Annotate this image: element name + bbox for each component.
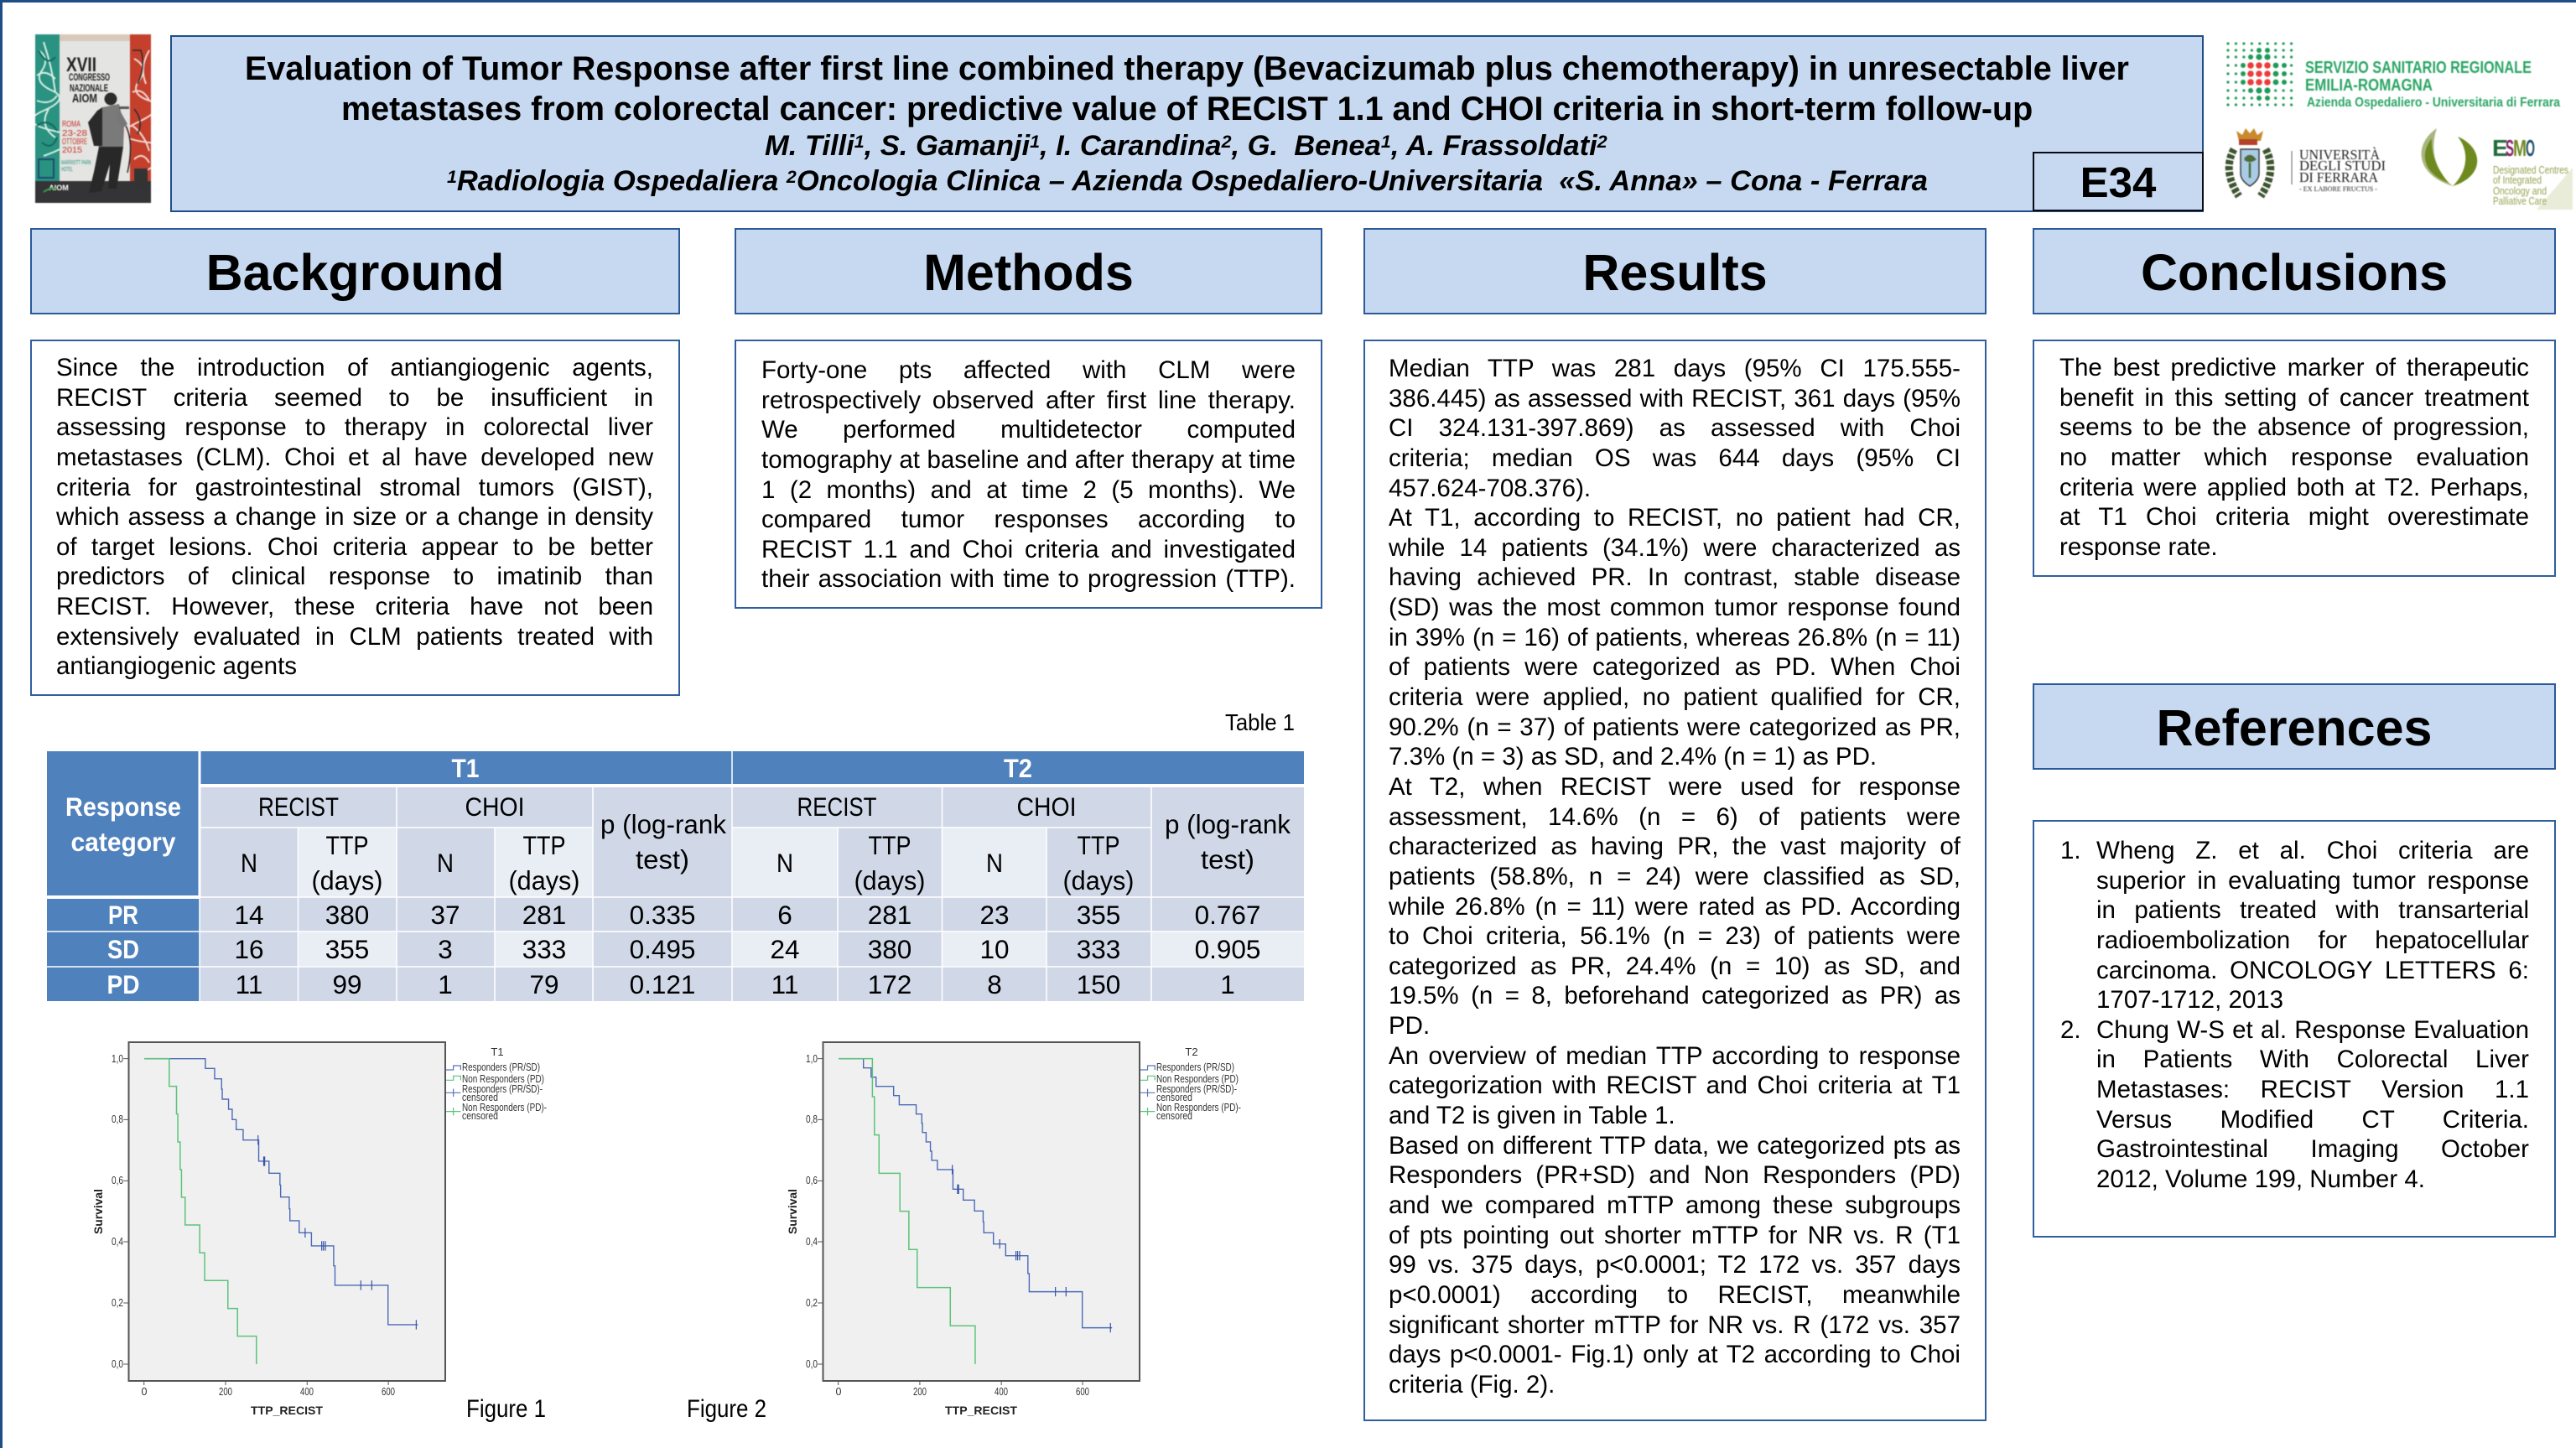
- panel: results text: categorization with RECIST and Choi criteria at T1: [1389, 1072, 1961, 1099]
- table row: PR: 355: [1077, 900, 1120, 930]
- poster image: AIOM congress: ROMA: [62, 120, 80, 129]
- panel: background text: criteria for gastrointestinal stromal tumors (GIST),: [56, 474, 653, 501]
- table column headings: (days): [854, 865, 926, 895]
- reference 2: in Patients With Colorectal Liver: [2096, 1046, 2529, 1073]
- chart: Kaplan-Meier T2: 1,0: [806, 1053, 818, 1065]
- reference 1: radioembolization for hepatocellular: [2096, 926, 2529, 954]
- chart: Kaplan-Meier T2: 0,4: [806, 1236, 818, 1248]
- logo: Universita degli Studi di Ferrara: [2224, 127, 2386, 199]
- panel: methods text: [735, 340, 1322, 609]
- table header: T1 and T2: PD: [107, 969, 139, 999]
- chart: Kaplan-Meier T2: Survival: [786, 1189, 799, 1234]
- table header: T1 and T2: PR: [108, 900, 138, 930]
- chart: Kaplan-Meier T1: 0: [142, 1386, 148, 1398]
- panel: methods text: RECIST 1.1 and Choi criteria and investigated: [761, 536, 1296, 563]
- panel: background text: predictors of clinical response to imatinib than: [56, 563, 653, 590]
- panel: conclusions text: response rate.: [2059, 533, 2218, 561]
- panel: results text: to Choi criteria, 56.1% (n = 23) of patients were: [1389, 922, 1961, 950]
- panel: conclusions text: benefit in this setting of cancer treatment: [2059, 384, 2529, 412]
- panel: conclusions text: [2033, 340, 2556, 577]
- table row: SD: [234, 934, 1260, 964]
- chart: Kaplan-Meier T2: 0: [836, 1386, 842, 1398]
- reference 2: Metastases: RECIST Version 1.1: [2096, 1076, 2529, 1103]
- table column headings: p (log-rank: [1165, 809, 1291, 839]
- table row: SD: 10: [979, 934, 1010, 964]
- reference 2: Chung W-S et al. Response Evaluation: [2096, 1016, 2529, 1044]
- chart: Kaplan-Meier T2: 0,0: [806, 1358, 818, 1370]
- chart: Kaplan-Meier T2: 400: [995, 1386, 1008, 1398]
- table row: SD: 333: [1077, 934, 1120, 964]
- poster image: AIOM congress: 23-28: [62, 129, 88, 138]
- chart: Kaplan-Meier T1: TTP_RECIST: [251, 1404, 323, 1417]
- heading: Background: [30, 228, 680, 314]
- poster code E34: E34: [2080, 158, 2156, 206]
- chart: Kaplan-Meier T1: [91, 1041, 547, 1417]
- logo: ESMO designated centre: O: [2526, 135, 2535, 161]
- logo: Universita degli Studi di Ferrara: UNIVERSITÀ: [2299, 147, 2380, 163]
- chart: Kaplan-Meier T1: T1: [491, 1046, 504, 1058]
- panel: background text: Since the introduction of antiangiogenic agents,: [56, 354, 653, 381]
- logo: Servizio Sanitario Regionale Emilia-Romagna: EMILIA-ROMAGNA: [2305, 76, 2433, 95]
- table column headings: N: [437, 848, 454, 878]
- panel: results text: Responders (PR+SD) and Non Responders (PD): [1389, 1161, 1961, 1189]
- title banner: [170, 35, 2204, 212]
- panel: results text: At T2, when RECIST were used for response: [1389, 773, 1961, 801]
- panel: references list: [2033, 820, 2556, 1238]
- panel: methods text: retrospectively observed after first line therapy.: [761, 387, 1296, 414]
- heading: Conclusions: Conclusions: [2141, 244, 2448, 301]
- chart: Kaplan-Meier T1: 200: [219, 1386, 232, 1398]
- chart: Kaplan-Meier T1: censored: [462, 1092, 498, 1103]
- table row: PR: 281: [522, 900, 566, 930]
- chart: Kaplan-Meier T1: Survival: [91, 1189, 105, 1234]
- table header: T1 and T2: T2: [1004, 753, 1032, 783]
- title line 2: metastases from colorectal cancer: predictive value of RECIST 1.1 and CHOI criteria in short-term follow-up: [341, 91, 2033, 127]
- heading: Conclusions: [2033, 228, 2556, 314]
- chart: Kaplan-Meier T1: 0,6: [112, 1175, 123, 1186]
- table column headings: RECIST: [797, 791, 877, 822]
- table header: T1 and T2: SD: [107, 934, 139, 964]
- panel: results text: [1363, 340, 1987, 1421]
- panel: results text: Median TTP was 281 days (95% CI 175.555-: [1389, 355, 1961, 382]
- reference 1: in patients treated with transarterial: [2096, 896, 2529, 924]
- panel: conclusions text: at T1 Choi criteria might overestimate: [2059, 503, 2529, 531]
- caption: Table 1: Table 1: [1225, 709, 1295, 735]
- panel: conclusions text: The best predictive marker of therapeutic: [2059, 354, 2529, 381]
- table row: PD: 11: [236, 969, 262, 999]
- panel: background text: RECIST criteria seemed to be insufficient in: [56, 384, 653, 412]
- table column headings: (days): [1063, 865, 1134, 895]
- logo: ESMO designated centre: M: [2513, 135, 2527, 161]
- panel: results text: CI 324.131-397.869) as assessed with Choi: [1389, 414, 1961, 442]
- table row: PD: 11: [771, 969, 798, 999]
- poster image: AIOM congress: AIOM: [72, 91, 97, 106]
- panel: results text: having achieved PR. In contrast, stable disease: [1389, 563, 1961, 591]
- chart: Kaplan-Meier T2: TTP_RECIST: [945, 1404, 1017, 1417]
- table column headings: TTP: [523, 830, 565, 860]
- chart: Kaplan-Meier T2: 600: [1076, 1386, 1089, 1398]
- panel: results text: of patients were categorized as PD. When Choi: [1389, 653, 1961, 681]
- logo: ESMO designated centre: S: [2506, 135, 2514, 161]
- table header: T1 and T2: Response: [65, 791, 181, 822]
- heading: References: References: [2157, 699, 2432, 756]
- table row: PR: 6: [777, 900, 792, 930]
- logo: Universita degli Studi di Ferrara: DI FERRARA: [2299, 169, 2378, 185]
- table row: SD: 16: [234, 934, 264, 964]
- table column headings: (days): [508, 865, 580, 895]
- panel: background text: extensively evaluated in CLM patients treated with: [56, 623, 653, 651]
- panel: results text: 386.445) as assessed with RECIST, 361 days (95%: [1389, 385, 1961, 413]
- logo: Servizio Sanitario Regionale Emilia-Romagna: [2225, 42, 2561, 111]
- heading: Methods: [735, 228, 1322, 314]
- panel: background text: metastases (CLM). Choi et al have developed new: [56, 444, 653, 471]
- table column headings: p (log-rank: [600, 809, 726, 839]
- chart: Kaplan-Meier T2: 0,6: [806, 1175, 818, 1186]
- panel: results text: criteria (Fig. 2).: [1389, 1371, 1555, 1399]
- panel: results text: patients (58.8%, n = 24) were classified as SD,: [1389, 863, 1961, 890]
- poster image: AIOM congress: NAZIONALE: [70, 82, 108, 94]
- table: response category by T1 and T2: [47, 751, 1304, 1001]
- table header: T1 and T2: [65, 753, 1032, 999]
- poster code E34: [2033, 152, 2204, 211]
- chart: Kaplan-Meier T2: 0,2: [806, 1297, 818, 1309]
- table row: PD: 8: [987, 969, 1002, 999]
- table row: PR: 281: [868, 900, 911, 930]
- table row: PD: 150: [1077, 969, 1120, 999]
- panel: references list: 2.: [2060, 1016, 2081, 1044]
- panel: results text: (SD) was the most common tumor response found: [1389, 594, 1961, 621]
- panel: results text: categorized as PR, 24.4% (n = 10) as SD, and: [1389, 952, 1961, 980]
- chart: Kaplan-Meier T2: 0,8: [806, 1113, 818, 1125]
- panel: results text: 19.5% (n = 8, beforehand categorized as PR) as: [1389, 982, 1961, 1009]
- panel: background text: [30, 340, 680, 696]
- table row: PR: 0.767: [1195, 900, 1260, 930]
- chart: Kaplan-Meier T2: [786, 1041, 1241, 1417]
- poster image: AIOM congress: HOTEL: [61, 167, 73, 173]
- panel: results text: days p<0.0001- Fig.1) only at T2 according to Choi: [1389, 1341, 1961, 1368]
- chart: Kaplan-Meier T1: 1,0: [112, 1053, 123, 1065]
- table column headings: N: [241, 848, 257, 878]
- table header: T1 and T2: category: [70, 827, 176, 857]
- panel: results text: 457.624-708.376).: [1389, 475, 1591, 502]
- heading: Background: Background: [206, 244, 504, 301]
- reference 2: [2060, 1016, 2529, 1193]
- panel: results text: criteria; median OS was 644 days (95% CI: [1389, 444, 1961, 472]
- table row: SD: 0.905: [1195, 934, 1260, 964]
- table header: T1 and T2: T1: [451, 753, 480, 783]
- panel: methods text: their association with time to progression (TTP).: [761, 565, 1296, 593]
- panel: results text: and T2 is given in Table 1.: [1389, 1102, 1675, 1129]
- panel: results text: PD.: [1389, 1012, 1430, 1040]
- panel: results text: 99 vs. 375 days, p<0.0001; T2 172 vs. 357 days: [1389, 1251, 1961, 1279]
- panel: results text: 7.3% (n = 3) as SD, and 2.4% (n = 1) as PD.: [1389, 743, 1877, 771]
- panel: methods text: tomography at baseline and after therapy at time: [761, 446, 1296, 474]
- table column headings: [241, 791, 1291, 895]
- poster image: AIOM congress: OTTOBRE: [62, 138, 87, 147]
- table column headings: RECIST: [258, 791, 339, 822]
- logo: ESMO designated centre: E: [2492, 135, 2508, 161]
- table row: PD: 0.121: [630, 969, 695, 999]
- heading: Methods: Methods: [923, 244, 1134, 301]
- panel: conclusions text: seems to be the absence of progression,: [2059, 413, 2529, 441]
- chart: Kaplan-Meier T1: 0,4: [112, 1236, 123, 1248]
- panel: results text: while 14 patients (34.1%) were characterized as: [1389, 534, 1961, 562]
- table row: SD: 333: [522, 934, 566, 964]
- chart: Kaplan-Meier T2: censored: [1156, 1092, 1192, 1103]
- table row: PD: 99: [332, 969, 362, 999]
- reference 2: 2012, Volume 199, Number 4.: [2096, 1165, 2425, 1193]
- table row: SD: 24: [770, 934, 800, 964]
- table column headings: TTP: [1077, 830, 1120, 860]
- panel: results text: Based on different TTP data, we categorized pts as: [1389, 1132, 1961, 1160]
- chart: Kaplan-Meier T1: 0,2: [112, 1297, 123, 1309]
- table row: PD: 1: [438, 969, 453, 999]
- panel: results text: 90.2% (n = 37) of patients were categorized as PR,: [1389, 714, 1961, 741]
- reference 2: Versus Modified CT Criteria.: [2096, 1106, 2529, 1134]
- panel: methods text: compared tumor responses according to: [761, 506, 1296, 533]
- panel: background text: assessing response to therapy in colorectal liver: [56, 413, 653, 441]
- table column headings: (days): [312, 865, 382, 895]
- table row: SD: 3: [438, 934, 453, 964]
- table column headings: TTP: [869, 830, 911, 860]
- panel: results text: and we compared mTTP among these subgroups: [1389, 1191, 1961, 1219]
- table row: PR: 37: [430, 900, 460, 930]
- title line 1: Evaluation of Tumor Response after first line combined therapy (Bevacizumab plus chemotherapy) in unresectable liver: [245, 50, 2129, 87]
- panel: results text: of pts pointing out shorter mTTP for NR vs. R (T1: [1389, 1222, 1961, 1249]
- logo: ESMO designated centre: [2420, 127, 2573, 210]
- chart: Kaplan-Meier T1: 400: [300, 1386, 314, 1398]
- logo: Universita degli Studi di Ferrara: DEGLI STUDI: [2299, 158, 2386, 174]
- chart: Kaplan-Meier T1: 0,8: [112, 1113, 123, 1125]
- logo: Universita degli Studi di Ferrara: - EX LABORE FRUCTUS -: [2299, 184, 2377, 193]
- poster image: AIOM congress: XVII: [66, 54, 96, 76]
- table row: SD: 355: [325, 934, 369, 964]
- panel: background text: RECIST. However, these criteria have not been: [56, 593, 653, 620]
- panel: results text: An overview of median TTP according to response: [1389, 1042, 1961, 1070]
- table column headings: test): [1201, 844, 1254, 875]
- chart: Kaplan-Meier T2: censored: [1156, 1110, 1192, 1122]
- table row: PR: 0.335: [630, 900, 695, 930]
- panel: background text: of target lesions. Choi criteria appear to be better: [56, 533, 653, 561]
- chart: Kaplan-Meier T2: 200: [913, 1386, 927, 1398]
- table column headings: N: [776, 848, 793, 878]
- panel: background text: antiangiogenic agents: [56, 652, 297, 680]
- logo: ESMO designated centre: Palliative Care: [2493, 195, 2547, 207]
- table column headings: CHOI: [1016, 791, 1077, 822]
- heading: Results: Results: [1582, 244, 1768, 301]
- table row: PD: 1: [1220, 969, 1235, 999]
- chart: Kaplan-Meier T1: censored: [462, 1110, 498, 1122]
- panel: results text: significant shorter mTTP for NR vs. R (172 vs. 357: [1389, 1311, 1961, 1338]
- logo: ESMO designated centre: of Integrated: [2493, 174, 2542, 186]
- panel: results text: p<0.0001) according to RECIST, meanwhile: [1389, 1281, 1961, 1309]
- panel: methods text: Forty-one pts affected with CLM were: [761, 356, 1296, 384]
- table row: PD: 79: [529, 969, 559, 999]
- heading: Results: [1363, 228, 1987, 314]
- poster image: AIOM congress: 2015: [62, 146, 82, 155]
- panel: results text: assessment, 14.6% (n = 6) of patients were: [1389, 803, 1961, 831]
- reference 1: 1707-1712, 2013: [2096, 986, 2283, 1014]
- reference 1: Wheng Z. et al. Choi criteria are: [2096, 837, 2529, 864]
- authors: M. Tilli1, S. Gamanji1, I. Carandina2, G. Benea1, A. Frassoldati2: [765, 130, 1607, 162]
- panel: results text: while 26.8% (n = 11) were rated as PD. According: [1389, 893, 1961, 921]
- reference 1: superior in evaluating tumor response: [2096, 867, 2529, 895]
- chart: Kaplan-Meier T2: T2: [1185, 1046, 1198, 1058]
- table column headings: CHOI: [465, 791, 525, 822]
- panel: results text: criteria were applied, no patient qualified for CR,: [1389, 683, 1961, 711]
- table column headings: TTP: [325, 830, 369, 860]
- affiliations: 1Radiologia Ospedaliera 2Oncologia Clinica – Azienda Ospedaliero-Universitaria «S. Anna» – Cona - Ferrara: [447, 165, 1928, 197]
- panel: background text: which assess a change in size or a change in density: [56, 503, 653, 531]
- heading: References: [2033, 683, 2556, 770]
- logo: ESMO designated centre: Oncology and: [2493, 184, 2547, 197]
- poster image: AIOM congress: MARRIOTT PARK: [61, 160, 91, 166]
- panel: conclusions text: criteria were applied both at T2. Perhaps,: [2059, 474, 2529, 501]
- panel: results text: characterized as having PR, the vast majority of: [1389, 833, 1961, 860]
- panel: methods text: We performed multidetector computed: [761, 416, 1296, 444]
- panel: conclusions text: no matter which response evaluation: [2059, 444, 2529, 471]
- table column headings: test): [636, 844, 689, 875]
- table column headings: N: [986, 848, 1003, 878]
- poster image: AIOM congress: AIOM: [49, 184, 69, 192]
- table row: PD: [236, 969, 1235, 999]
- reference 1: [2060, 837, 2529, 1014]
- table row: PR: 14: [234, 900, 264, 930]
- table row: PR: [234, 900, 1260, 930]
- reference 2: Gastrointestinal Imaging October: [2096, 1135, 2529, 1163]
- poster image: AIOM congress: [34, 34, 152, 204]
- panel: methods text: 1 (2 months) and at time 2 (5 months). We: [761, 476, 1296, 504]
- poster image: AIOM congress: CONGRESSO: [69, 71, 110, 83]
- table row: PD: 172: [868, 969, 911, 999]
- table row: PR: 23: [979, 900, 1010, 930]
- panel: results text: in 39% (n = 16) of patients, whereas 26.8% (n = 11): [1389, 624, 1961, 651]
- reference 1: carcinoma. ONCOLOGY LETTERS 6:: [2096, 957, 2529, 984]
- panel: results text: At T1, according to RECIST, no patient had CR,: [1389, 504, 1961, 532]
- chart: Kaplan-Meier T1: 600: [382, 1386, 395, 1398]
- table row: SD: 380: [868, 934, 911, 964]
- chart: Kaplan-Meier T1: 0,0: [112, 1358, 123, 1370]
- table row: PR: 380: [325, 900, 369, 930]
- panel: references list: 1.: [2060, 837, 2081, 864]
- table row: SD: 0.495: [630, 934, 695, 964]
